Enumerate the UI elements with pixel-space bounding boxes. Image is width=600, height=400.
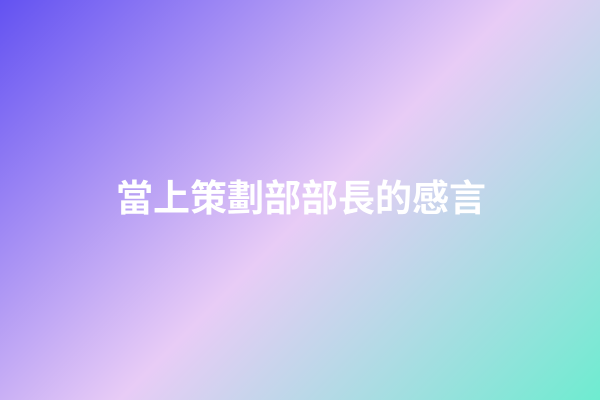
title: 當上策劃部部長的感言 xyxy=(116,178,486,219)
